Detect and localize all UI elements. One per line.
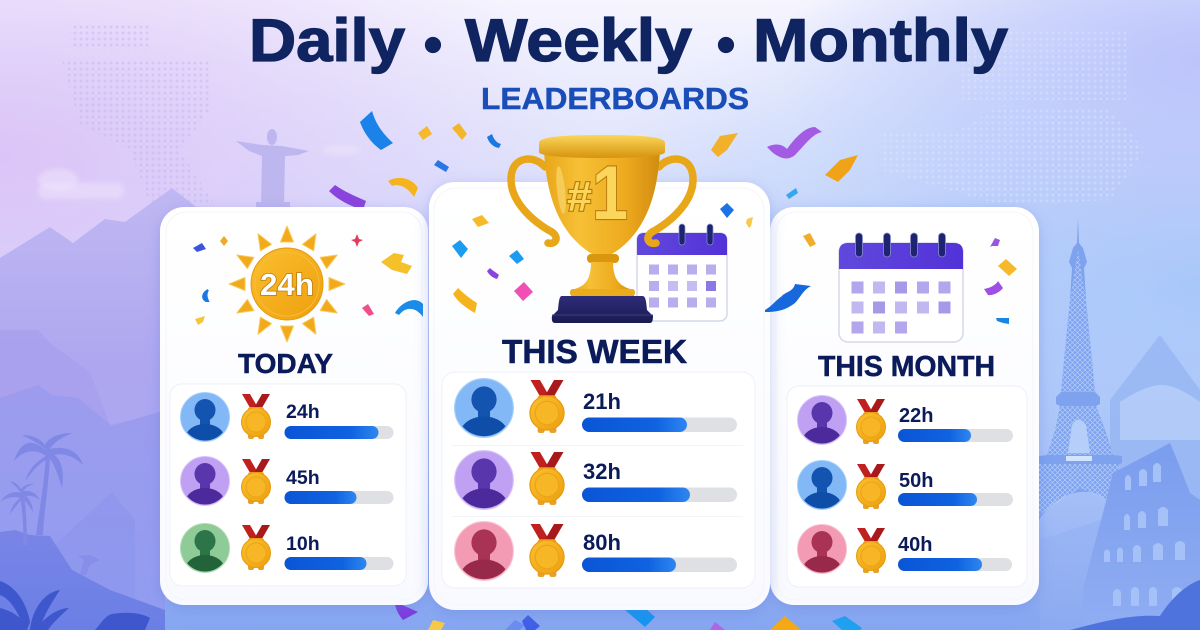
panel: this week	[429, 135, 811, 610]
trophy label: #	[567, 173, 592, 220]
trophy label: 1	[592, 151, 628, 236]
row 80h	[455, 522, 737, 595]
title: •	[424, 16, 442, 74]
leaderboard week	[442, 372, 755, 595]
row 40h: 40h	[898, 534, 932, 556]
leaderboard month	[787, 386, 1027, 587]
row 10h	[180, 524, 394, 585]
sun icon: 24h	[260, 267, 314, 302]
calendar icon month	[839, 233, 963, 342]
Colosseum	[1083, 443, 1200, 630]
calendar icon week	[637, 224, 727, 321]
title: Weekly	[465, 7, 693, 74]
sun icon	[229, 226, 345, 342]
dotted world map left	[62, 25, 215, 205]
clouds left	[38, 145, 361, 199]
row 22h	[798, 396, 1013, 457]
leaderboard today	[170, 384, 406, 586]
row 24h: 24h	[286, 401, 320, 423]
palm trees left	[0, 433, 100, 575]
heading week: THIS WEEK	[502, 333, 687, 370]
confetti today	[193, 234, 423, 325]
confetti month	[803, 233, 1017, 324]
row 24h	[180, 392, 394, 454]
foreground plants left	[0, 581, 150, 630]
statue silhouette	[236, 129, 309, 209]
row 45h	[180, 456, 394, 518]
row 50h: 50h	[899, 470, 933, 492]
row 32h: 32h	[583, 459, 621, 484]
title	[249, 7, 1009, 74]
heading today: TODAY	[238, 348, 333, 379]
row 21h	[455, 379, 737, 452]
row 10h: 10h	[286, 533, 320, 555]
trophy label	[567, 151, 628, 236]
title: Monthly	[753, 7, 1009, 74]
trophy	[511, 135, 693, 323]
dotted world map right	[880, 30, 1145, 205]
Eiffel tower	[1039, 218, 1122, 520]
heading month: THIS MONTH	[818, 351, 995, 383]
subtitle: LEADERBOARDS	[481, 81, 749, 116]
row 32h	[455, 451, 737, 524]
title: •	[717, 16, 735, 74]
row 21h: 21h	[583, 389, 621, 414]
row 50h	[798, 460, 1013, 522]
mountains left	[0, 188, 230, 630]
row 22h: 22h	[899, 405, 933, 427]
panel: this month	[770, 207, 1039, 605]
right mountain and clouds	[1040, 335, 1200, 630]
foreground plants right	[1070, 580, 1200, 630]
row 45h: 45h	[286, 467, 320, 489]
title: Daily	[249, 7, 406, 74]
panel: today	[160, 207, 428, 605]
row 80h: 80h	[583, 530, 621, 555]
confetti week	[452, 203, 811, 313]
confetti behind cards	[329, 111, 862, 630]
row 40h	[798, 524, 1012, 586]
